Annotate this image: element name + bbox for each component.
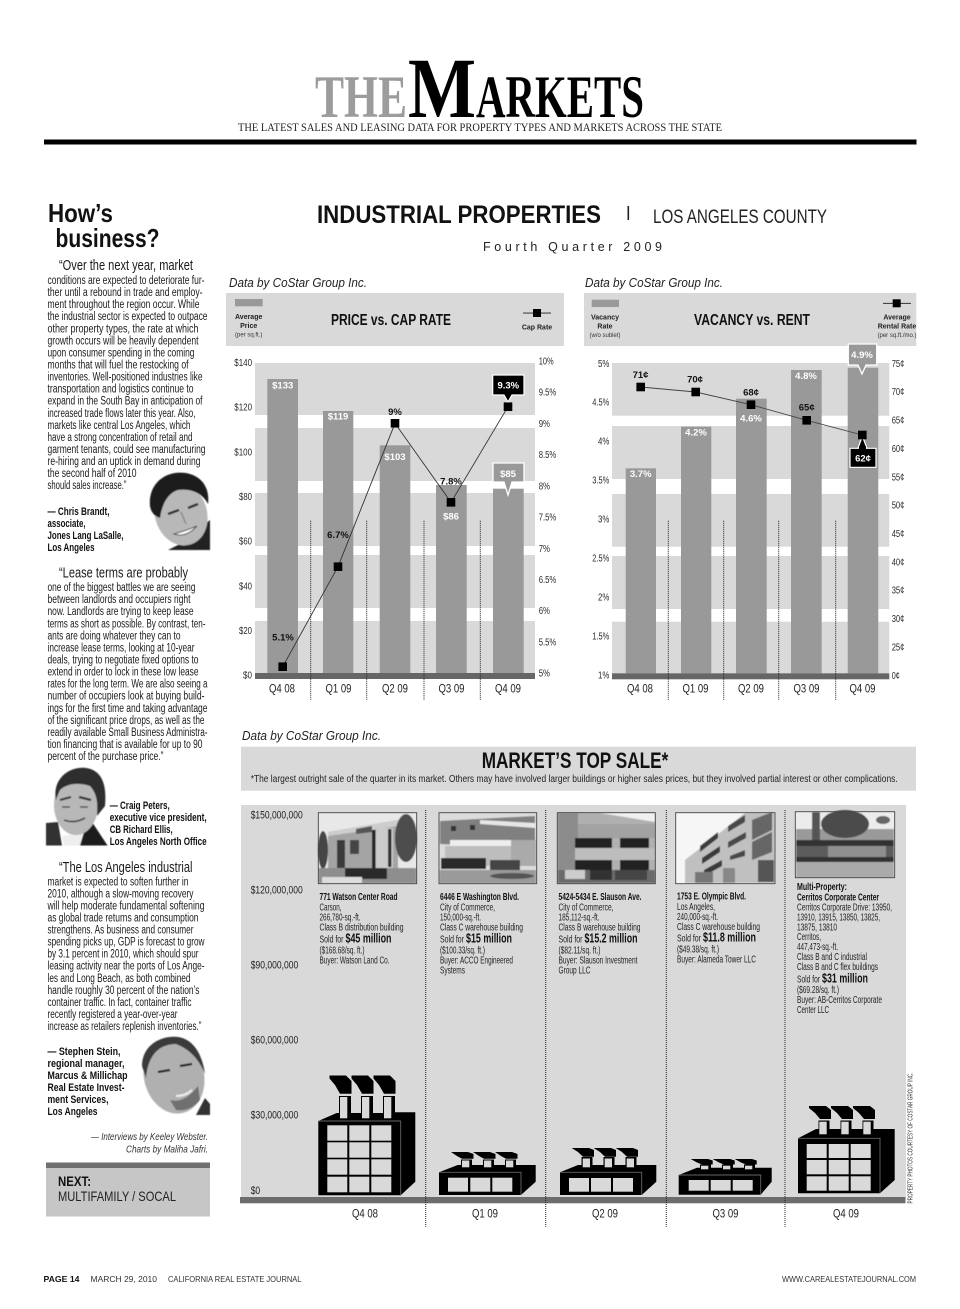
x axis: sale quarters: Q4 09 — [833, 1206, 859, 1220]
right axis: rent: 50¢ — [892, 501, 904, 512]
left axis: vacancy: 4.5% — [592, 398, 609, 409]
quote: Stephen Stein: spending picks up, GDP is forecast to grow — [48, 937, 205, 949]
text: 1753 E. Olympic Blvd.: ($49.38/sq. ft.) — [677, 944, 719, 956]
vacancy labels: 4.6% — [740, 414, 762, 424]
quote: Chris Brandt: have a strong concentration of retail and — [48, 432, 192, 444]
text: 771 Watson Center Road: Buyer: Watson Land Co. — [320, 956, 390, 967]
portrait: Chris Brandt — [146, 473, 216, 552]
left axis: vacancy: 2% — [598, 592, 609, 603]
photo: 1753 E. Olympic Blvd. — [676, 812, 775, 884]
callout: 62 cents: 62¢ — [855, 454, 872, 464]
text: 1753 E. Olympic Blvd.: 1753 E. Olympic Blvd. — [677, 892, 746, 902]
quote: Chris Brandt: the industrial sector is expected to outpace — [48, 311, 208, 323]
footer: WWW.CAREALESTATEJOURNAL.COM — [782, 1274, 916, 1284]
quote: Chris Brandt: transportation and logistics continue to — [48, 384, 194, 396]
x axis: quarters — [627, 682, 876, 696]
x axis: quarters: Q1 09 — [682, 682, 709, 696]
photo: 771 Watson Center Road — [318, 813, 417, 884]
quote: Stephen Stein: container traffic. In fact, container traffic — [48, 997, 192, 1009]
left axis: price: $40 — [239, 581, 252, 592]
attribution: Stephen Stein: regional manager, — [48, 1058, 124, 1070]
text: Cerritos Corporate Center: Center LLC — [797, 1005, 829, 1016]
callout: 9.3%: 9.3% — [497, 380, 520, 392]
left axis: vacancy: 1.5% — [592, 631, 609, 642]
quote: Chris Brandt: should sales increase.” — [48, 480, 127, 492]
icon: factory Q3 09 — [679, 1159, 772, 1195]
text: 6446 E Washington Blvd.: Systems — [440, 966, 465, 977]
x axis: quarters: Q3 09 — [438, 682, 465, 696]
left axis: vacancy — [592, 359, 609, 681]
price labels: $119 — [328, 412, 348, 422]
text: 6446 E Washington Blvd.: Class C warehouse building — [440, 923, 523, 934]
next box — [46, 1162, 210, 1216]
y axis: sale price: $150,000,000 — [251, 809, 303, 821]
quote: Chris Brandt: “Over the next year, market — [59, 257, 194, 274]
right axis: rent: 65¢ — [892, 416, 904, 426]
quote: Craig Peters: extend in order to lock in these low lease — [48, 666, 198, 678]
chart header: vacancy vs rent: Rental Rate — [878, 324, 916, 330]
chart header: price vs cap rate: Price — [240, 323, 257, 330]
vacancy labels — [630, 371, 817, 480]
callout: 4.9%: 4.9% — [851, 350, 873, 361]
rent labels: 68¢ — [743, 387, 760, 398]
text: 6446 E Washington Blvd.: ($100.33/sq. ft.) — [440, 946, 485, 957]
portrait: Craig Peters — [46, 768, 108, 846]
cap rate labels: 6.7% — [327, 530, 349, 541]
photo: Cerritos Corporate Center — [795, 810, 895, 878]
left axis: vacancy: 1% — [598, 670, 609, 681]
right axis: cap rate — [539, 356, 556, 680]
chart header: vacancy vs rent: VACANCY vs. RENT — [694, 312, 810, 329]
text: Cerritos Corporate Center: 13910, 13915, 13850, 13825, — [797, 912, 880, 923]
text: 5424-5434 E. Slauson Ave.: Group LLC — [558, 966, 590, 977]
chart header: price vs cap rate: PRICE vs. CAP RATE — [331, 312, 451, 329]
quote: Craig Peters: deals, trying to negotiate fixed options to — [48, 654, 198, 666]
attribution: Stephen Stein: — Stephen Stein, — [48, 1046, 120, 1058]
quote: Craig Peters: ants are doing whatever they can to — [48, 630, 180, 642]
text: 5424-5434 E. Slauson Ave.: ($82.11/sq. ft.) — [558, 946, 600, 957]
right axis: cap rate: 6% — [539, 606, 550, 617]
x axis: sale quarters: Q4 08 — [352, 1206, 378, 1220]
text: Cerritos Corporate Center: Sold for$31 million — [797, 972, 868, 986]
chart header: vacancy vs rent: (w/o sublet) — [589, 333, 621, 339]
quote: Chris Brandt: months that will fuel the restocking of — [48, 359, 189, 371]
quote: Stephen Stein — [47, 859, 205, 1033]
x axis: sale quarters: Q1 09 — [472, 1206, 498, 1220]
photo credit: PROPERTY PHOTOS COURTESY OF COSTAR GROUP INC. — [908, 1072, 914, 1204]
left axis: price: $80 — [239, 492, 252, 503]
right axis: rent: 0¢ — [892, 671, 900, 682]
icon: factory Q2 09 — [560, 1148, 656, 1195]
text: 5424-5434 E. Slauson Ave.: Buyer: Slauson Investment — [558, 956, 638, 967]
quote: Stephen Stein: handle roughly 30 percent of the nation’s — [48, 985, 200, 997]
cap rate labels — [272, 407, 462, 644]
x axis: quarters: Q3 09 — [794, 682, 820, 696]
markers: cap rate — [278, 402, 512, 671]
text: 1753 E. Olympic Blvd.: Class C warehouse building — [677, 922, 760, 933]
attribution: Chris Brandt — [48, 506, 124, 554]
right axis: rent: 40¢ — [892, 557, 904, 568]
footer: CALIFORNIA REAL ESTATE JOURNAL — [168, 1274, 302, 1284]
quote: Stephen Stein: will help moderate fundamental softening — [47, 900, 204, 912]
text: 771 Watson Center Road: Carson, — [320, 902, 342, 913]
x axis: sale quarters: Q3 09 — [712, 1206, 739, 1220]
text: 1753 E. Olympic Blvd.: 240,000-sq.-ft. — [677, 912, 718, 923]
quote: Craig Peters: “Lease terms are probably — [59, 564, 188, 582]
text: 6446 E Washington Blvd. — [440, 892, 523, 977]
text: 6446 E Washington Blvd.: Buyer: ACCO Engineered — [440, 956, 513, 967]
x axis: quarters: Q4 09 — [495, 682, 521, 696]
text: 5424-5434 E. Slauson Ave.: 5424-5434 E. Slauson Ave. — [558, 892, 642, 903]
quote: Craig Peters: terms as short as possible. By contrast, ten- — [48, 618, 206, 630]
masthead title: M — [408, 40, 476, 136]
chart header: vacancy vs rent: Average — [883, 314, 911, 322]
quote: Craig Peters: increase lease terms, looking at 10-year — [48, 642, 195, 654]
text: 5424-5434 E. Slauson Ave.: 185,112-sq.-ft. — [558, 913, 600, 924]
x axis: quarters: Q4 09 — [850, 682, 876, 696]
text: 1753 E. Olympic Blvd.: Los Angeles, — [677, 902, 715, 913]
attribution: Craig Peters — [110, 800, 207, 848]
markers: rental rate — [636, 383, 867, 439]
attribution: Stephen Stein: Los Angeles — [48, 1106, 98, 1118]
text: Cerritos Corporate Center: Class B and C industrial — [797, 952, 867, 963]
rent labels: 65¢ — [799, 402, 815, 413]
next box: NEXT: — [58, 1173, 91, 1189]
attribution: Craig Peters: Los Angeles North Office — [110, 836, 207, 848]
quote: Stephen Stein: increase as retailers replenish inventories.” — [48, 1021, 202, 1033]
quote: Chris Brandt: inventories. Well-positioned industries like — [48, 372, 202, 384]
footer: PAGE 14 — [44, 1274, 80, 1284]
quote: Chris Brandt: expand in the South Bay in anticipation of — [48, 396, 203, 408]
attribution: Chris Brandt: Los Angeles — [48, 542, 94, 554]
right axis: rent: 70¢ — [892, 387, 904, 398]
price labels — [272, 380, 459, 522]
section heading: industrial properties: LOS ANGELES COUNTY — [653, 207, 827, 228]
left axis: price — [234, 358, 252, 682]
text: Cerritos Corporate Center: 13875, 13810 — [797, 922, 837, 933]
chart: price vs cap rate — [226, 293, 564, 700]
right axis: cap rate: 5% — [539, 669, 550, 680]
right axis: cap rate: 10% — [539, 356, 554, 368]
right axis: cap rate: 7.5% — [539, 513, 556, 524]
chart header: price vs cap rate: Cap Rate — [522, 324, 552, 332]
right axis: cap rate: 6.5% — [539, 575, 556, 586]
portrait: Stephen Stein — [136, 1032, 212, 1120]
left axis: vacancy: 4% — [598, 437, 609, 448]
icon: factory Q4 08 — [318, 1076, 415, 1195]
vacancy labels: 3.7% — [630, 469, 652, 480]
quote: Chris Brandt: garment tenants, could see manufacturing — [48, 444, 206, 456]
chart header: price vs cap rate: (per sq.ft.) — [235, 332, 262, 338]
text: 771 Watson Center Road: Sold for$45 million — [320, 931, 392, 945]
quote: Chris Brandt: other property types, the rate at which — [48, 323, 198, 335]
icon: factory Q4 09 — [798, 1106, 895, 1193]
attribution: Stephen Stein: Real Estate Invest- — [48, 1082, 125, 1094]
quote: Craig Peters: number of occupiers look at buying build- — [48, 691, 205, 703]
chart header: vacancy vs rent: (per sq.ft./mo.) — [877, 333, 917, 339]
masthead title — [315, 40, 644, 136]
quote: Stephen Stein: “The Los Angeles industrial — [59, 859, 192, 876]
section heading: industrial properties — [317, 201, 827, 229]
text: Cerritos Corporate Center: Multi-Property: — [797, 882, 847, 893]
quote: Craig Peters: percent of the purchase price.” — [48, 751, 164, 763]
price labels: $103 — [384, 452, 406, 463]
photo: 6446 E Washington Blvd. — [439, 813, 537, 884]
heading: how's business: How’s — [48, 198, 113, 228]
left axis: vacancy: 5% — [598, 359, 609, 370]
text: Cerritos Corporate Center — [797, 882, 892, 1016]
panel: top sale chart — [240, 805, 906, 1227]
text: 5424-5434 E. Slauson Ave.: Sold for$15.2 million — [558, 931, 638, 945]
quote: Craig Peters: ings for the first time and taking advantage — [48, 703, 208, 715]
quote: Craig Peters: tion financing that is available for up to 90 — [48, 739, 202, 751]
x axis: quarters — [269, 682, 521, 696]
interview credit: Charts by Maliha Jafri. — [126, 1144, 208, 1156]
rent labels — [633, 370, 815, 413]
masthead title: THE — [315, 64, 407, 130]
vacancy labels: 4.8% — [795, 371, 817, 382]
line: cap rate — [283, 407, 508, 667]
footer — [44, 1274, 916, 1284]
right axis: cap rate: 9.5% — [539, 388, 556, 399]
attribution: Craig Peters: CB Richard Ellis, — [110, 824, 173, 836]
quote: Craig Peters: between landlords and occupiers right — [48, 594, 191, 606]
heading: how's business — [48, 198, 160, 253]
text: Cerritos Corporate Center: 447,473-sq.-ft. — [797, 942, 838, 953]
source note: price chart: Data by CoStar Group Inc. — [229, 275, 367, 290]
cap rate labels: 5.1% — [272, 632, 294, 644]
icon: factory Q1 09 — [439, 1152, 536, 1195]
quote: Craig Peters: now. Landlords are trying to keep lease — [48, 606, 194, 618]
masthead title: ARKETS — [476, 64, 644, 130]
left axis: vacancy: 3% — [598, 514, 609, 525]
y axis: sale price: $30,000,000 — [251, 1109, 298, 1121]
text: Cerritos Corporate Center: Class B and C flex buildings — [797, 962, 878, 973]
quote: Chris Brandt: conditions are expected to deteriorate fur- — [48, 275, 205, 287]
right axis: rent: 55¢ — [892, 472, 904, 483]
y axis: sale price: $90,000,000 — [251, 959, 298, 971]
attribution: Craig Peters: executive vice president, — [110, 812, 207, 824]
right axis: cap rate: 5.5% — [539, 637, 556, 648]
chart: vacancy vs rent — [584, 293, 917, 700]
right axis: cap rate: 8.5% — [539, 450, 556, 461]
source note: vacancy chart: Data by CoStar Group Inc. — [585, 275, 723, 290]
left axis: vacancy: 2.5% — [592, 553, 609, 564]
attribution: Stephen Stein — [48, 1046, 128, 1118]
quote: Stephen Stein: market is expected to soften further in — [48, 876, 188, 888]
quote: Chris Brandt — [48, 257, 208, 492]
text: 771 Watson Center Road — [320, 892, 404, 967]
y axis: sale price — [251, 809, 303, 1197]
attribution: Stephen Stein: Marcus & Millichap — [48, 1070, 128, 1082]
x axis: sale quarters: Q2 09 — [592, 1206, 618, 1220]
text: 5424-5434 E. Slauson Ave. — [558, 892, 642, 977]
quote: Stephen Stein: 2010, although a slow-moving recovery — [48, 888, 194, 900]
y axis: sale price: $60,000,000 — [251, 1034, 298, 1046]
text: 771 Watson Center Road: Class B distribution building — [320, 923, 404, 934]
text: Cerritos Corporate Center: ($69.28/sq. ft.) — [797, 985, 839, 996]
subheading: fourth quarter: Fourth Quarter 2009 — [483, 240, 662, 254]
attribution: Stephen Stein: ment Services, — [48, 1094, 108, 1106]
left axis: price: $0 — [243, 671, 252, 682]
line: average rental rate — [641, 387, 862, 435]
quote: Chris Brandt: re-hiring and an uptick in demand during — [48, 456, 200, 468]
quote: Stephen Stein: by 3.1 percent in 2010, which should spur — [48, 949, 199, 961]
callout: 62 cents — [850, 436, 876, 467]
section heading: industrial properties: INDUSTRIAL PROPERTIES — [317, 201, 601, 229]
left axis: price: $60 — [239, 537, 252, 548]
price labels: $86 — [443, 512, 459, 522]
x axis: quarters: Q4 08 — [269, 682, 295, 696]
quote: Stephen Stein: as global trade returns and consumption — [48, 912, 198, 924]
bars: average price — [267, 379, 524, 673]
text: Cerritos Corporate Center: Cerritos Corporate Drive: 13950, — [797, 902, 892, 913]
text: 6446 E Washington Blvd.: 150,000-sq.-ft. — [440, 913, 481, 924]
x axis: quarters: Q1 09 — [326, 682, 352, 696]
x axis: quarters: Q4 08 — [627, 682, 653, 696]
vacancy labels: 4.2% — [685, 428, 707, 438]
rent labels: 70¢ — [687, 374, 704, 385]
attribution: Chris Brandt: Jones Lang LaSalle, — [48, 530, 124, 542]
panel: market's top sale header: MARKET’S TOP SALE* — [482, 748, 669, 773]
y axis: sale price: $0 — [251, 1185, 260, 1197]
text: 6446 E Washington Blvd.: City of Commerce, — [440, 902, 495, 913]
cap rate labels: 7.8% — [440, 476, 462, 488]
right axis: rent: 75¢ — [892, 359, 904, 370]
quote: Chris Brandt: the second half of 2010 — [48, 468, 136, 480]
left axis: vacancy: 3.5% — [592, 476, 609, 486]
text: 1753 E. Olympic Blvd.: Buyer: Alameda Tower LLC — [677, 954, 756, 966]
left axis: price: $140 — [234, 358, 252, 369]
interview credit: — Interviews by Keeley Webster. — [90, 1131, 208, 1143]
left axis: price: $120 — [234, 403, 252, 414]
quote: Craig Peters: rates for the long term. We are also seeing a — [48, 679, 208, 691]
quote: Craig Peters: one of the biggest battles we are seeing — [48, 582, 196, 594]
chart header: price vs cap rate: Average — [235, 314, 262, 321]
text: 6446 E Washington Blvd.: 6446 E Washington Blvd. — [440, 892, 519, 903]
quote: Stephen Stein: les and Long Beach, as both combined — [48, 973, 190, 985]
chart header: vacancy vs rent — [584, 293, 917, 346]
text: 771 Watson Center Road: ($168.68/sq. ft.) — [320, 946, 364, 957]
photo: 5424-5434 E. Slauson Ave. — [557, 813, 655, 884]
attribution: Craig Peters: — Craig Peters, — [110, 800, 170, 812]
text: 6446 E Washington Blvd.: Sold for$15 million — [440, 931, 512, 945]
quote: Craig Peters: readily available Small Business Administra- — [48, 727, 208, 739]
right axis: cap rate: 7% — [539, 544, 550, 555]
callout: 9.3% — [493, 375, 524, 402]
quote: Chris Brandt: upon consumer spending in the coming — [48, 347, 194, 359]
quote: Chris Brandt: ther until a rebound in trade and employ- — [48, 287, 203, 299]
right axis: rent: 25¢ — [892, 642, 904, 653]
x axis: sale quarters — [352, 1206, 859, 1220]
quote: Chris Brandt: increased trade flows later this year. Also, — [48, 408, 196, 420]
attribution: Chris Brandt: associate, — [48, 518, 86, 530]
next box: MULTIFAMILY / SOCAL — [58, 1188, 176, 1204]
quote: Stephen Stein: recently registered a year-over-year — [48, 1009, 178, 1021]
text: 771 Watson Center Road: 266,780-sq.-ft. — [320, 913, 360, 924]
quote: Craig Peters — [48, 564, 208, 763]
right axis: rent: 30¢ — [892, 614, 904, 625]
callout: $85: $85 — [500, 469, 517, 480]
interview credit — [90, 1131, 208, 1156]
source note: market top sale: Data by CoStar Group Inc. — [242, 728, 381, 743]
quote: Craig Peters: of the significant price drops, as well as the — [48, 715, 204, 727]
right axis: cap rate: 8% — [539, 481, 550, 492]
text: 5424-5434 E. Slauson Ave.: Class B warehouse building — [558, 923, 640, 934]
text: 771 Watson Center Road: 771 Watson Center Road — [320, 892, 398, 903]
text: 1753 E. Olympic Blvd. — [677, 892, 760, 966]
quote: Chris Brandt: growth occurs will be heavily dependent — [48, 335, 199, 347]
chart header: price vs cap rate — [226, 293, 564, 346]
x axis: quarters: Q2 09 — [382, 682, 408, 696]
text: Cerritos Corporate Center: Cerritos, — [797, 932, 821, 943]
callout: 4.9% — [848, 344, 877, 374]
x axis: quarters: Q2 09 — [738, 682, 764, 696]
chart header: vacancy vs rent: Vacancy — [591, 314, 619, 322]
left axis: price: $20 — [239, 626, 252, 637]
footer: MARCH 29, 2010 — [90, 1274, 157, 1284]
cap rate labels: 9% — [388, 407, 402, 418]
right axis: cap rate: 9% — [539, 419, 550, 430]
right axis: rent: 45¢ — [892, 529, 904, 540]
quote: Chris Brandt: ment throughout the region occur. While — [48, 299, 200, 311]
quote: Stephen Stein: leasing activity near the ports of Los Ange- — [48, 961, 205, 973]
text: 1753 E. Olympic Blvd.: Sold for$11.8 million — [677, 930, 756, 944]
quote: Chris Brandt: markets like central Los Angeles, which — [48, 420, 190, 432]
bars: vacancy rate — [626, 368, 878, 673]
text: Cerritos Corporate Center: Buyer: AB-Cerritos Corporate — [797, 995, 882, 1006]
panel: market's top sale header — [241, 747, 916, 791]
chart header: vacancy vs rent: Rate — [597, 324, 613, 330]
right axis: rent — [892, 359, 904, 682]
left axis: price: $100 — [234, 447, 252, 458]
right axis: rent: 60¢ — [892, 444, 904, 455]
attribution: Chris Brandt: — Chris Brandt, — [48, 506, 110, 518]
quote: Stephen Stein: strengthens. As business and consumer — [48, 924, 194, 936]
right axis: rent: 35¢ — [892, 586, 904, 597]
text: 5424-5434 E. Slauson Ave.: City of Commerce, — [558, 902, 614, 913]
price labels: $133 — [272, 380, 293, 392]
heading: how's business: business? — [56, 223, 160, 253]
masthead subtitle: THE LATEST SALES AND LEASING DATA FOR PROPERTY TYPES AND MARKETS ACROSS THE STATE — [238, 122, 722, 134]
rent labels: 71¢ — [633, 370, 649, 381]
callout: $85 — [493, 463, 524, 495]
y axis: sale price: $120,000,000 — [251, 884, 303, 896]
text: Cerritos Corporate Center: Cerritos Corporate Center — [797, 892, 879, 903]
